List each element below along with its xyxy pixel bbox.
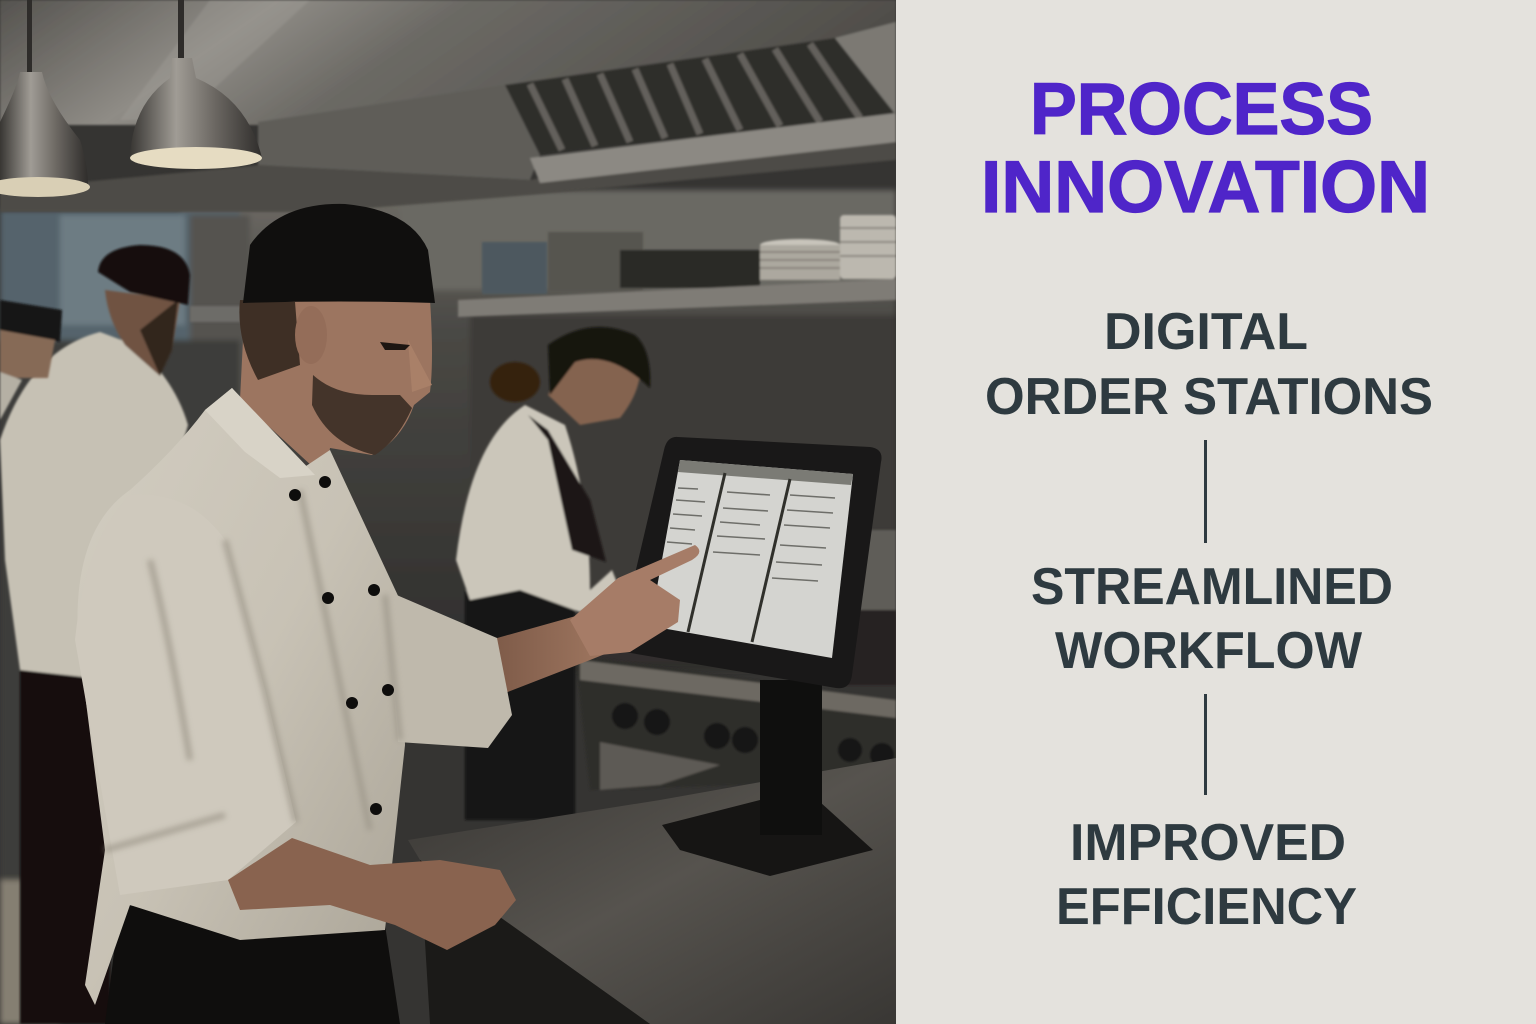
tablet order lines xyxy=(667,488,835,581)
stainless steel exhaust hood xyxy=(0,0,896,212)
connector line 2 xyxy=(1204,694,1207,795)
step: digital order stations xyxy=(985,303,1433,426)
step: streamlined workflow: STREAMLINED xyxy=(1031,558,1393,616)
forearm right xyxy=(490,590,640,695)
panel: text side xyxy=(896,0,1536,1024)
beard xyxy=(312,375,412,455)
nose and eye xyxy=(408,340,432,392)
coat collar and buttons xyxy=(205,388,394,815)
woman chef at back xyxy=(456,327,650,820)
black chef hat xyxy=(243,204,435,303)
step: digital order stations: DIGITAL xyxy=(1104,303,1308,361)
title: INNOVATION xyxy=(981,147,1430,228)
title: PROCESS xyxy=(1030,69,1373,150)
pendant lamp right xyxy=(130,0,262,169)
pointing hand xyxy=(570,545,699,656)
step: digital order stations: ORDER STATIONS xyxy=(985,368,1433,426)
tablet order screen xyxy=(618,437,882,688)
pendant lamp left xyxy=(0,0,90,197)
back chef with hat xyxy=(0,245,190,1024)
step: improved efficiency: EFFICIENCY xyxy=(1056,878,1357,936)
neck and head xyxy=(240,300,432,478)
step: streamlined workflow xyxy=(1031,558,1393,680)
main chef xyxy=(75,204,699,1024)
steel counter xyxy=(408,758,896,1024)
black trousers xyxy=(105,905,400,1024)
stove range xyxy=(575,530,896,790)
raised sleeve xyxy=(385,590,512,748)
step: improved efficiency: IMPROVED xyxy=(1070,814,1346,872)
shelf with plates and pots xyxy=(190,215,896,322)
sleeve fold shadows xyxy=(105,490,400,850)
tablet stand and base xyxy=(662,680,873,876)
connector line 1 xyxy=(1204,440,1207,543)
white chef coat xyxy=(77,388,405,1005)
panel: kitchen photo xyxy=(0,0,896,1024)
hair and ear xyxy=(239,300,300,380)
title xyxy=(981,69,1430,228)
left sleeve xyxy=(75,495,296,895)
step: improved efficiency xyxy=(1056,814,1357,936)
lower arm and hand on counter xyxy=(228,838,516,950)
kitchen back wall xyxy=(0,190,896,1024)
step: streamlined workflow: WORKFLOW xyxy=(1055,622,1363,680)
far left chef xyxy=(0,300,62,420)
